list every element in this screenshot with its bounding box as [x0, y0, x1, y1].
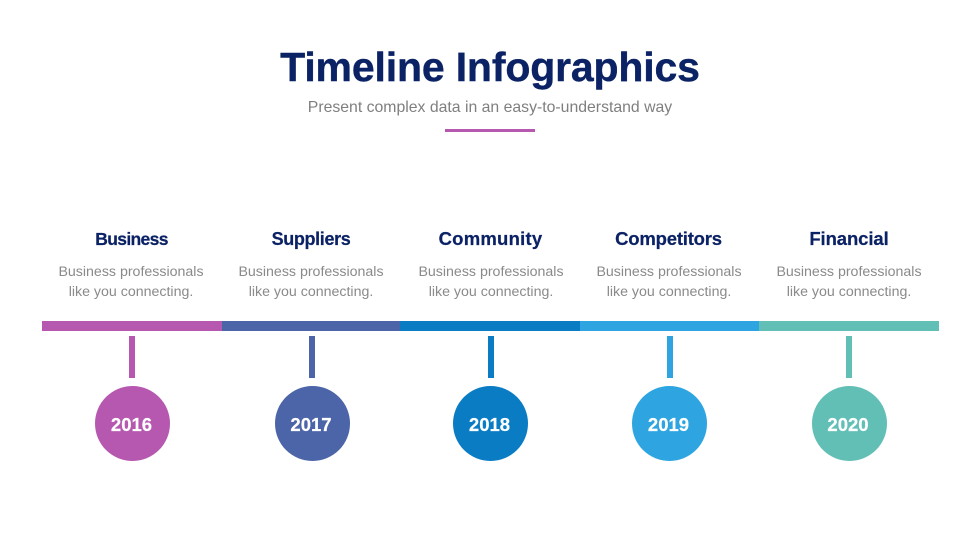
year circle: 2020 — [827, 414, 869, 435]
year circle: 2019 — [648, 414, 689, 435]
connector — [666, 336, 672, 378]
description — [596, 264, 742, 300]
description — [238, 264, 384, 300]
description: like you connecting. — [69, 284, 193, 300]
bar segment: 2018 — [400, 321, 580, 331]
heading: Community — [439, 228, 542, 248]
description: Business professionals — [776, 264, 922, 280]
description: Business professionals — [418, 264, 564, 280]
description — [418, 264, 564, 300]
year circle — [274, 386, 350, 461]
description: like you connecting. — [787, 284, 911, 300]
description — [58, 264, 204, 300]
description: Business professionals — [58, 264, 204, 280]
description: like you connecting. — [249, 284, 373, 300]
year circle — [453, 386, 528, 461]
description: Business professionals — [238, 264, 384, 280]
year circle: 2017 — [290, 414, 332, 435]
year circle: 2018 — [469, 414, 510, 435]
heading: Financial — [809, 228, 889, 248]
connector — [129, 336, 135, 378]
description — [776, 264, 922, 300]
connector — [309, 336, 315, 378]
description: like you connecting. — [429, 284, 553, 300]
heading: Competitors — [615, 228, 722, 248]
year circle: 2016 — [111, 414, 152, 435]
bar segment: 2019 — [580, 321, 759, 331]
subtitle: Present complex data in an easy-to-understand way — [308, 98, 672, 116]
heading: Suppliers — [272, 228, 350, 248]
year circle — [95, 386, 170, 461]
title: Timeline Infographics — [280, 44, 700, 90]
description: like you connecting. — [607, 284, 731, 300]
bar segment: 2016 — [42, 321, 222, 331]
connector — [488, 336, 494, 378]
title accent line — [445, 129, 535, 132]
bar segment: 2020 — [759, 321, 939, 331]
timeline bar — [42, 321, 939, 331]
year circle — [812, 386, 886, 461]
description: Business professionals — [596, 264, 742, 280]
connector — [846, 336, 852, 378]
heading: Business — [95, 228, 168, 248]
bar segment: 2017 — [222, 321, 400, 331]
year circle — [632, 386, 707, 461]
